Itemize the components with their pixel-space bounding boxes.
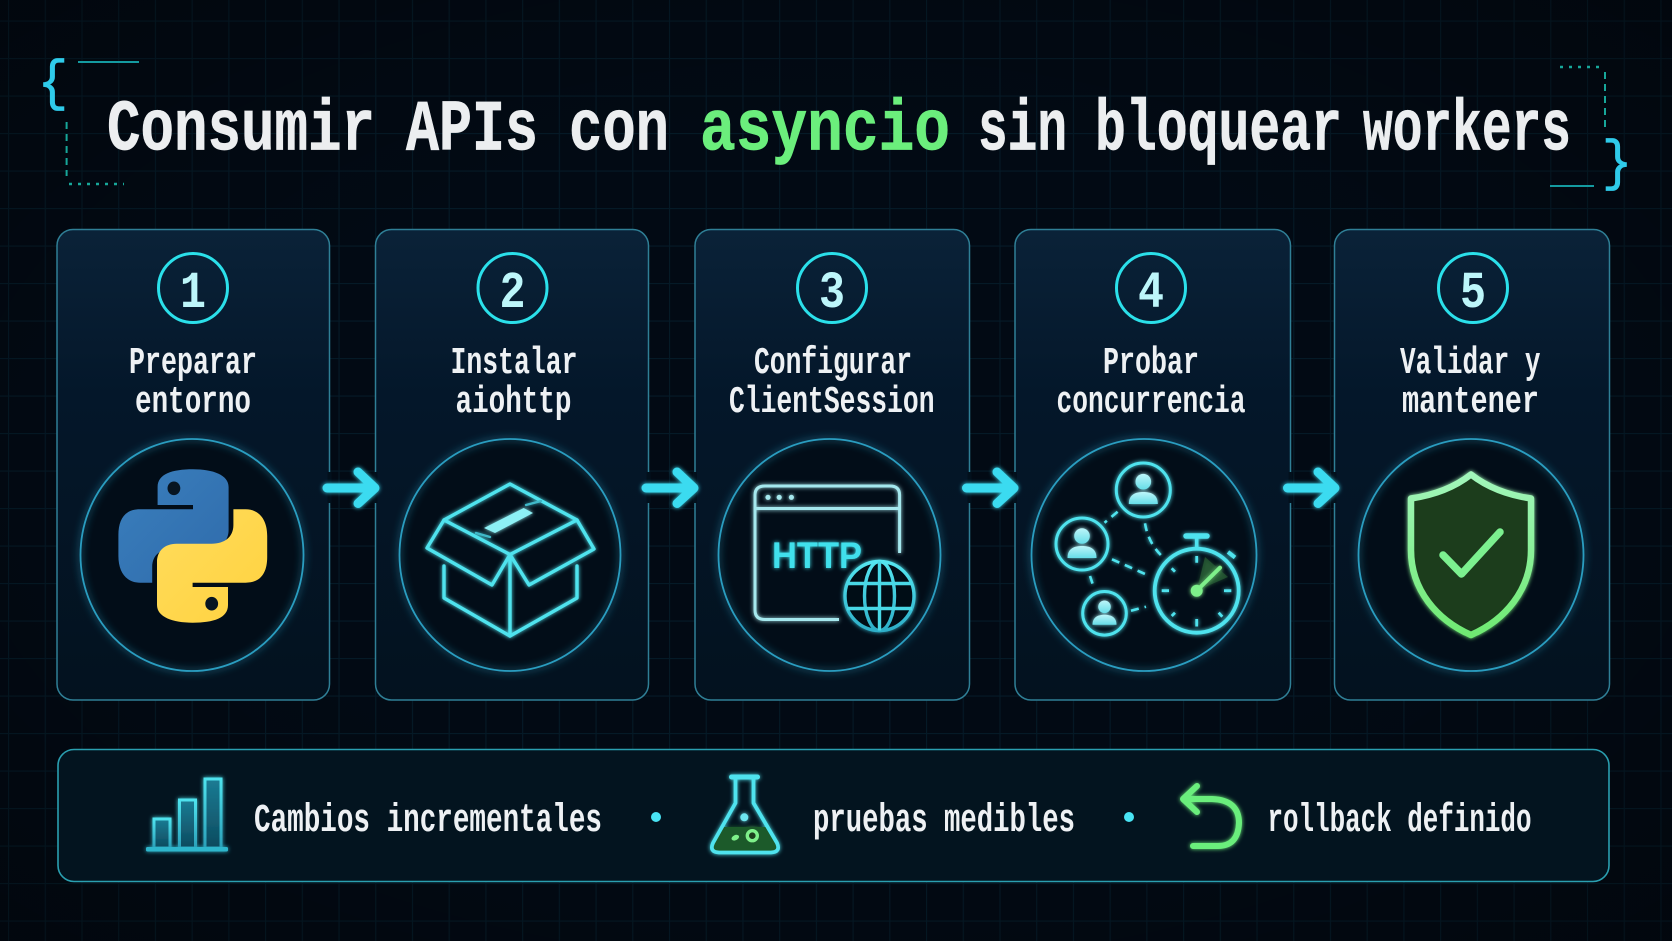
step number 4 bbox=[1116, 254, 1186, 323]
icon: rollback arrow bbox=[1183, 786, 1239, 846]
user 1 bbox=[1116, 463, 1170, 517]
title: bloquear bbox=[1095, 90, 1342, 172]
step title: mantener bbox=[1402, 381, 1539, 424]
title decoration: top-left brace and guides bbox=[38, 52, 139, 184]
separator dot bbox=[1124, 812, 1134, 822]
step title bbox=[1056, 342, 1246, 424]
icon circle bbox=[718, 439, 940, 671]
arrow: step 1 to 2 bbox=[327, 472, 376, 504]
icon: concurrent users and stopwatch bbox=[1056, 463, 1239, 635]
label: pruebas medibles: pruebas medibles bbox=[813, 799, 1075, 844]
step title: Configurar bbox=[754, 342, 912, 385]
step number 2 bbox=[478, 254, 547, 323]
title: APIs bbox=[406, 90, 538, 172]
icon: flask bbox=[712, 777, 778, 852]
step number 2: 2 bbox=[500, 264, 526, 323]
panel: step 1 bbox=[57, 230, 330, 700]
step number 1: 1 bbox=[180, 264, 206, 323]
panel: step 3 bbox=[695, 230, 970, 700]
user 2 bbox=[1056, 518, 1108, 570]
icon: http window and globe bbox=[755, 486, 914, 630]
icon circle bbox=[1032, 439, 1256, 671]
icon: open box bbox=[427, 484, 594, 636]
step number 4: 4 bbox=[1138, 264, 1164, 323]
stopwatch bbox=[1155, 536, 1239, 633]
panel: step 2 bbox=[376, 230, 648, 700]
separator dot bbox=[651, 812, 661, 822]
step number 3: 3 bbox=[819, 264, 845, 323]
label: rollback definido: rollback definido bbox=[1268, 799, 1532, 844]
highlighted word: asyncio: asyncio bbox=[700, 90, 950, 172]
step title: Preparar bbox=[129, 342, 257, 385]
globe bbox=[845, 562, 914, 630]
step title: Instalar bbox=[450, 342, 578, 385]
icon circle bbox=[1358, 439, 1584, 671]
title: workers bbox=[1363, 90, 1571, 172]
dashed connections bbox=[1090, 512, 1161, 611]
step number 1 bbox=[158, 254, 228, 323]
icon: python logo bbox=[118, 469, 267, 623]
step title: entorno bbox=[135, 381, 251, 424]
footer panel bbox=[58, 750, 1609, 882]
label: cambios incrementales: Cambios incrementales bbox=[254, 799, 602, 844]
step title: Validar y bbox=[1400, 342, 1541, 385]
right brace: } bbox=[1602, 132, 1632, 196]
user 3 bbox=[1083, 592, 1126, 635]
title: Consumir bbox=[107, 90, 375, 172]
step title bbox=[729, 342, 934, 424]
panel: step 5 bbox=[1334, 230, 1610, 700]
step title bbox=[129, 342, 257, 424]
step number 3 bbox=[798, 254, 866, 323]
icon circle bbox=[400, 439, 620, 671]
title decoration: bottom-right brace and guides bbox=[1550, 67, 1632, 196]
panel: step 4 bbox=[1015, 230, 1290, 700]
title bbox=[107, 90, 1571, 172]
step title bbox=[450, 342, 578, 424]
icon: http window and globe: HTTP bbox=[772, 535, 862, 576]
icon: shield with check bbox=[1411, 474, 1531, 635]
step title: ClientSession bbox=[729, 381, 934, 424]
arrow: step 2 to 3 bbox=[646, 472, 695, 504]
step title: aiohttp bbox=[456, 381, 572, 424]
title: con bbox=[569, 90, 669, 172]
step title: Probar bbox=[1103, 342, 1199, 385]
arrow: step 3 to 4 bbox=[966, 472, 1015, 504]
icon: incremental bars bbox=[146, 779, 228, 852]
title: sin bbox=[978, 90, 1067, 172]
step number 5: 5 bbox=[1460, 264, 1486, 323]
icon circle bbox=[80, 439, 304, 671]
left brace: { bbox=[38, 52, 68, 116]
step title bbox=[1400, 342, 1541, 424]
arrow: step 4 to 5 bbox=[1288, 472, 1335, 504]
step number 5 bbox=[1438, 254, 1508, 323]
step title: concurrencia bbox=[1056, 381, 1246, 424]
